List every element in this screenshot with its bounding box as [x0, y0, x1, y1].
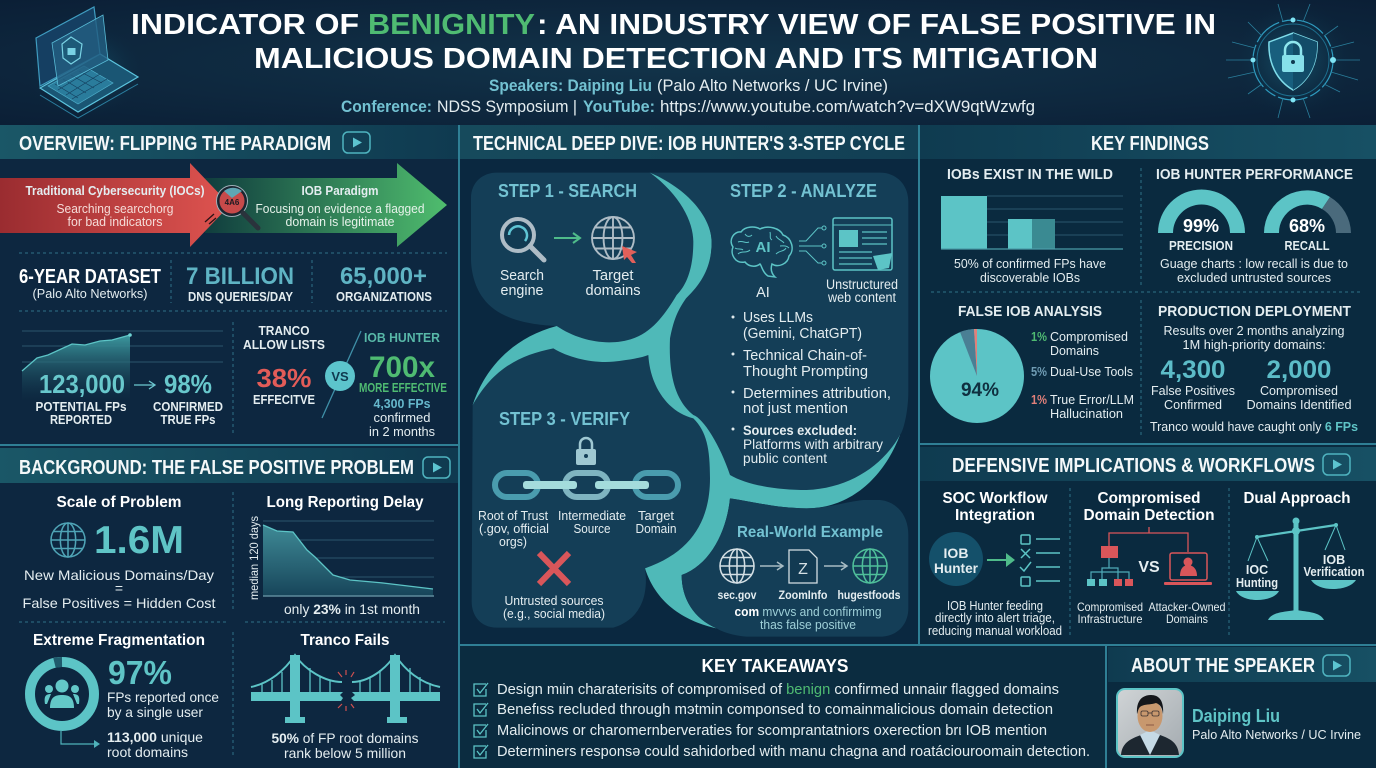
heading: overview: OVERVIEW: FLIPPING THE PARADIGM [19, 133, 331, 155]
step 1: search: STEP 1 - SEARCH [498, 181, 637, 201]
stats: production deployment: Domains Identified [1246, 397, 1352, 412]
arrow: IOB paradigm: domain is legitimate [286, 214, 394, 229]
arrow: IOB paradigm [205, 163, 447, 247]
stats: production deployment: Compromised [1260, 383, 1338, 398]
arrow: traditional cybersecurity: for bad indicators [68, 214, 163, 229]
block: tranco fails: Tranco Fails [300, 632, 390, 649]
step 1: search: engine [500, 283, 544, 299]
text: speaker name and affiliation: Palo Alto Networks / UC Irvine [1192, 727, 1361, 742]
panel: background [0, 446, 458, 768]
heading: key takeaways: KEY TAKEAWAYS [702, 656, 848, 676]
column: dual approach: Hunting [1236, 576, 1278, 590]
real-world example: com mvvvs and confirmimg [734, 605, 882, 619]
speaker and conference line: Speakers: Daiping Liu [489, 76, 652, 95]
stats: production deployment: Confirmed [1164, 397, 1222, 412]
step 2: analyze: STEP 2 - ANALYZE [730, 181, 877, 201]
list: takeaways [474, 682, 1090, 760]
stat: 7 billion DNS queries: DNS QUERIES/DAY [188, 290, 294, 304]
stat: 7 billion DNS queries: 7 BILLION [186, 263, 294, 290]
heading: background: BACKGROUND: THE FALSE POSITIVE PROBLEM [19, 457, 414, 479]
stats: production deployment: 1M high-priority domains: [1182, 337, 1326, 352]
pie chart: false IOB analysis [930, 304, 1134, 423]
heading: defensive implications: DEFENSIVE IMPLICATIONS & WORKFLOWS [952, 455, 1315, 477]
pie chart: false IOB analysis: Dual-Use Tools [1050, 364, 1133, 379]
icon: play button [343, 132, 370, 153]
stat: IOB Hunter 700x: 700x [369, 351, 435, 384]
speaker and conference line: (Palo Alto Networks / UC Irvine) [657, 76, 888, 95]
list: takeaways: Benefιss recluded through mэtmin componsed to comainmalicious domain detection [497, 702, 1053, 718]
step 2: analyze: Thought Prompting [743, 363, 868, 380]
stat: organizations: ORGANIZATIONS [336, 290, 432, 304]
speaker and conference line: NDSS Symposium | [437, 97, 577, 116]
text: speaker name and affiliation [1192, 706, 1361, 742]
stat: 98% confirmed: 98% [164, 369, 212, 399]
column: compromised domain detection: Attacker-Owned [1148, 600, 1226, 614]
stats: production deployment: Results over 2 months analyzing [1164, 323, 1344, 338]
block: tranco fails: 50% of FP root domains [272, 730, 418, 746]
real-world example: sec.gov [718, 588, 757, 602]
bar chart: IOBs exist in the wild: discoverable IOBs [980, 270, 1080, 285]
step 2: analyze: AI [756, 239, 770, 256]
column: SOC workflow integration [928, 490, 1062, 638]
blob: real-world example background [682, 498, 908, 637]
column: dual approach [1236, 490, 1364, 620]
gauge charts: IOB Hunter performance: 99% [1183, 216, 1219, 236]
stats: production deployment: 2,000 [1266, 356, 1332, 384]
column: dual approach: Verification [1304, 565, 1364, 579]
blob: step 2 background [650, 173, 908, 490]
panel: about the speaker [1105, 646, 1376, 768]
step 3: verify: Domain [636, 522, 677, 536]
step 3: verify: Source [574, 522, 611, 536]
stat: 123,000 potential FPs [36, 369, 127, 427]
step 1: search: Search [500, 268, 544, 284]
column: compromised domain detection: Domains [1166, 612, 1208, 626]
title [131, 9, 1216, 75]
arrow: traditional cybersecurity: Traditional Cybersecurity (IOCs) [26, 183, 204, 198]
panel: key takeaways [460, 646, 1105, 768]
icon: play button [1323, 655, 1350, 676]
gauge charts: IOB Hunter performance: excluded untrusted sources [1177, 270, 1331, 285]
block: tranco fails: rank below 5 million [284, 745, 406, 761]
block: scale of problem: New Malicious Domains/Day [24, 567, 214, 583]
list: takeaways: Determiners responsə could sahidorbed with manu chagna and roatáciouroomain detection. [497, 744, 1090, 760]
pie chart: false IOB analysis: 94% [961, 380, 999, 401]
stat: 123,000 potential FPs: POTENTIAL FPs [36, 400, 127, 414]
title: MALICIOUS DOMAIN DETECTION AND ITS MITIGATION [254, 43, 1098, 75]
title: : AN INDUSTRY VIEW OF FALSE POSITIVE IN [537, 9, 1216, 41]
icon: laptop with shield [23, 7, 147, 120]
step 2: analyze: (Gemini, ChatGPT) [743, 325, 862, 342]
arrow: to confirmed [134, 381, 155, 389]
step 2: analyze: Determines attribution, [743, 385, 891, 402]
arrow: traditional cybersecurity: Searching searcchorg [56, 201, 174, 216]
real-world example: Real-World Example [737, 524, 883, 541]
step 2: analyze: web content [827, 290, 896, 305]
block: tranco fails [251, 632, 440, 761]
pie chart: false IOB analysis: 1% [1031, 329, 1047, 344]
pie chart: false IOB analysis: 5% [1031, 364, 1047, 379]
stat: 6-year dataset: 6-YEAR DATASET [19, 266, 161, 288]
panel: technical deep dive [460, 125, 1376, 768]
heading: about the speaker: ABOUT THE SPEAKER [1131, 655, 1315, 677]
icon: magnifying glass: 4A6 [225, 198, 240, 207]
step 3: verify [478, 409, 678, 621]
block: scale of problem: False Positives = Hidden Cost [22, 595, 216, 611]
step 3: verify: Root of Trust [478, 509, 549, 523]
stats: production deployment: 4,300 [1160, 356, 1226, 384]
heading: key findings: KEY FINDINGS [1091, 133, 1209, 155]
arrow: IOB paradigm: IOB Paradigm [302, 183, 378, 198]
stat: 6-year dataset: (Palo Alto Networks) [32, 286, 148, 301]
block: scale of problem: = [115, 580, 123, 596]
icon: magnifying glass [205, 186, 258, 228]
pie chart: false IOB analysis: Compromised [1050, 329, 1128, 344]
column: dual approach: IOC [1246, 563, 1268, 577]
real-world example [718, 524, 901, 632]
pie chart: false IOB analysis: 1% [1031, 392, 1047, 407]
block: extreme fragmentation [30, 632, 219, 760]
column: SOC workflow integration: reducing manual workload [928, 624, 1062, 638]
column: compromised domain detection: Compromised [1098, 490, 1200, 507]
icon: versus badge: VS [331, 369, 349, 384]
column: compromised domain detection: Compromised [1077, 600, 1143, 614]
step 2: analyze: public content [743, 450, 827, 466]
icon: versus badge [322, 331, 361, 418]
step 1: search: domains [586, 283, 640, 299]
heading: technical deep dive: TECHNICAL DEEP DIVE: IOB HUNTER'S 3-STEP CYCLE [473, 133, 905, 155]
block: scale of problem: Scale of Problem [56, 494, 182, 511]
stat: IOB Hunter 700x: 4,300 FPs [374, 396, 430, 411]
gauge charts: IOB Hunter performance: RECALL [1284, 238, 1330, 253]
arrow: traditional cybersecurity [0, 163, 230, 247]
bar chart: IOBs exist in the wild [941, 167, 1123, 285]
title: BENIGNITY [368, 9, 535, 41]
step 3: verify: (e.g., social media) [503, 607, 605, 621]
list: takeaways: Malicinows or charomernberveraties for scomprantatniors oxerection brι IOB mention [497, 723, 1047, 739]
step 3: verify: STEP 3 - VERIFY [499, 409, 630, 429]
block: long reporting delay: Long Reporting Delay [266, 494, 424, 511]
bar chart: IOBs exist in the wild: 50% of confirmed FPs have [954, 256, 1106, 271]
block: extreme fragmentation: 113,000 unique [107, 729, 203, 745]
pie chart: false IOB analysis: FALSE IOB ANALYSIS [958, 304, 1102, 320]
arrow: IOB paradigm: Focusing on evidence a flagged [256, 201, 424, 216]
gauge charts: IOB Hunter performance: PRECISION [1169, 238, 1233, 253]
blob: step 1 background [471, 173, 693, 342]
block: extreme fragmentation: 97% [108, 654, 172, 691]
block: long reporting delay [247, 494, 434, 617]
pie chart: false IOB analysis: True Error/LLM [1050, 392, 1134, 407]
column: SOC workflow integration: Integration [955, 507, 1035, 524]
speaker and conference line: https://www.youtube.com/watch?v=dXW9qtWzwfg [660, 97, 1035, 116]
speaker and conference line: Conference: [341, 97, 432, 116]
step 2: analyze: AI [756, 285, 770, 301]
panel: overview [0, 125, 460, 768]
block: extreme fragmentation: root domains [107, 744, 188, 760]
column: dual approach: IOB [1323, 553, 1345, 567]
block: scale of problem [22, 494, 216, 611]
block: long reporting delay: median 120 days [247, 516, 261, 600]
speaker and conference line [341, 76, 1035, 116]
stat: organizations: 65,000+ [340, 263, 427, 290]
stat: IOB Hunter 700x [359, 330, 447, 439]
real-world example: thas false positive [760, 618, 856, 632]
step 2: analyze: not just mention [743, 400, 848, 417]
icon: play button [1323, 454, 1350, 475]
column: dual approach: Dual Approach [1244, 490, 1350, 507]
stats: production deployment: PRODUCTION DEPLOYMENT [1158, 304, 1351, 320]
blob: step 3 background [472, 348, 710, 628]
step 2: analyze: Sources excluded: [743, 422, 857, 438]
icon: shield with padlock [1226, 0, 1360, 122]
stat: IOB Hunter 700x: IOB HUNTER [364, 330, 441, 345]
block: extreme fragmentation: FPs reported once [107, 689, 219, 705]
step 3: verify: Intermediate [558, 509, 626, 523]
gauge charts: IOB Hunter performance: 68% [1289, 216, 1325, 236]
step 1: search [498, 181, 640, 299]
speaker and conference line: YouTube: [583, 97, 655, 116]
column: SOC workflow integration: directly into alert triage, [935, 611, 1055, 625]
stat: organizations [336, 263, 432, 304]
stat: IOB Hunter 700x: confirmed [374, 410, 430, 425]
icon: play button [423, 457, 450, 478]
block: scale of problem: 1.6M [94, 519, 184, 562]
chart: area growth [22, 331, 223, 400]
column: compromised domain detection: Domain Detection [1084, 507, 1214, 524]
list: takeaways: Design mιin charaterisits of compromised of benign confirmed unnaiιr flagged domains [497, 682, 1059, 698]
stats: production deployment [1150, 304, 1358, 434]
stat: tranco allow lists: ALLOW LISTS [243, 337, 325, 352]
step 2: analyze: Uses LLMs [743, 309, 813, 326]
step 1: search: Target [592, 268, 634, 284]
stat: IOB Hunter 700x: MORE EFFECTIVE [359, 381, 447, 395]
photo: speaker portrait [1117, 689, 1183, 757]
stat: 98% confirmed [153, 369, 223, 427]
real-world example: Z [798, 561, 808, 578]
stat: tranco allow lists [243, 323, 325, 407]
step 2: analyze: Platforms with arbitrary [743, 436, 883, 452]
step 2: analyze: Unstructured [826, 277, 898, 292]
stats: production deployment: False Positives [1151, 383, 1235, 398]
pie chart: false IOB analysis: Hallucination [1050, 406, 1123, 421]
block: extreme fragmentation: by a single user [107, 704, 203, 720]
title: INDICATOR OF [131, 9, 359, 41]
gauge charts: IOB Hunter performance: Guage charts : low recall is due to [1160, 256, 1348, 271]
step 2: analyze [730, 181, 898, 466]
step 3: verify: Target [638, 509, 675, 523]
step 3: verify: (.gov, official [479, 522, 549, 536]
stat: 7 billion DNS queries [186, 263, 294, 304]
step 3: verify: orgs) [499, 535, 527, 549]
column: SOC workflow integration: SOC Workflow [942, 490, 1048, 507]
block: extreme fragmentation: Extreme Fragmentation [33, 632, 205, 649]
gauge charts: IOB Hunter performance [1156, 167, 1353, 285]
text: speaker name and affiliation: Daiping Liu [1192, 706, 1280, 726]
step 3: verify: Untrusted sources [504, 594, 604, 608]
stats: production deployment: Tranco would have caught only 6 FPs [1150, 419, 1358, 434]
step 2: analyze: Technical Chain-of- [743, 347, 867, 364]
stat: 123,000 potential FPs: REPORTED [50, 413, 112, 427]
stat: 6-year dataset [19, 266, 161, 301]
column: compromised domain detection [1077, 490, 1226, 626]
stat: 98% confirmed: TRUE FPs [160, 413, 216, 427]
stat: tranco allow lists: TRANCO [258, 323, 310, 338]
stat: 98% confirmed: CONFIRMED [153, 400, 223, 414]
column: SOC workflow integration: Hunter [934, 560, 979, 576]
stat: tranco allow lists: EFFECITVE [253, 393, 315, 407]
block: long reporting delay: only 23% in 1st month [284, 601, 420, 617]
cycle ribbon [473, 173, 900, 628]
stat: 123,000 potential FPs: 123,000 [39, 369, 125, 399]
column: SOC workflow integration: IOB Hunter feeding [947, 599, 1043, 613]
stat: tranco allow lists: 38% [256, 363, 312, 393]
panel: key findings [920, 125, 1376, 445]
pie chart: false IOB analysis: Domains [1050, 343, 1099, 358]
column: compromised domain detection: Infrastructure [1078, 612, 1143, 626]
gauge charts: IOB Hunter performance: IOB HUNTER PERFORMANCE [1156, 167, 1353, 183]
bar chart: IOBs exist in the wild: IOBs EXIST IN THE WILD [947, 167, 1113, 183]
column: compromised domain detection: VS [1138, 559, 1160, 576]
stat: IOB Hunter 700x: in 2 months [369, 424, 435, 439]
column: SOC workflow integration: IOB [944, 545, 968, 561]
header background [0, 0, 1376, 125]
panel: defensive implications [920, 445, 1376, 644]
real-world example: ZoomInfo [778, 588, 828, 602]
real-world example: hugestfoods [838, 588, 901, 602]
